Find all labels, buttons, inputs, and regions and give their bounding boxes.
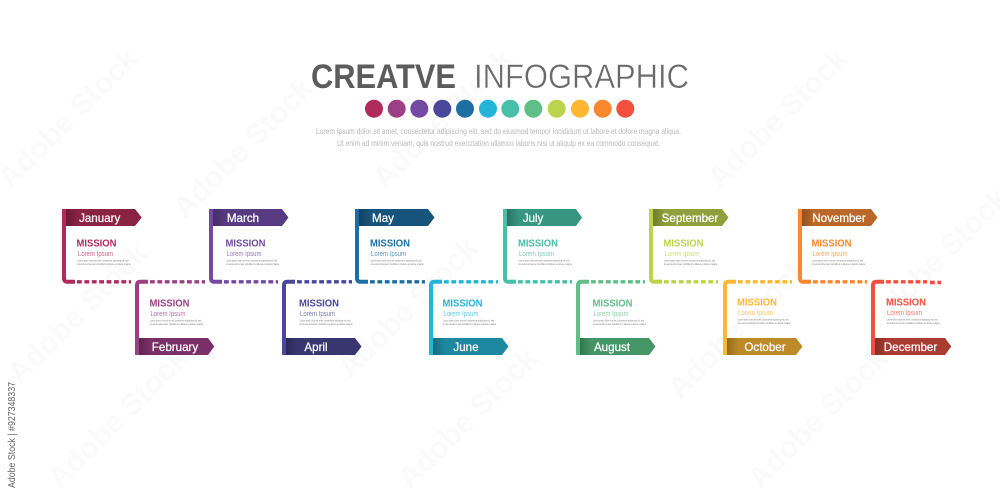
card: January: January xyxy=(79,212,121,225)
card: January xyxy=(64,209,142,282)
card: July: do eiusmod tempor incididunt ut labore et dolore magna xyxy=(518,262,572,266)
card: July: MISSION xyxy=(518,238,558,250)
text: Adobe Stock xyxy=(662,252,815,405)
card: May xyxy=(357,209,434,282)
card: June: do eiusmod tempor incididunt ut labore et dolore magna xyxy=(443,322,496,326)
card: December: do eiusmod tempor incididunt ut labore et dolore magna xyxy=(886,321,940,325)
card: November: Lorem ipsum dolor sit amet, consectetur adipiscing elit, sed xyxy=(812,258,863,262)
card: January: Lorem Ipsum xyxy=(78,249,113,258)
card: October xyxy=(725,282,802,355)
intro paragraph xyxy=(316,126,681,148)
colour dots row xyxy=(365,100,634,118)
card: May: Lorem Ipsum xyxy=(371,249,406,258)
card: October: October xyxy=(744,341,786,354)
card: July: July xyxy=(523,212,544,225)
card: November: MISSION xyxy=(812,238,852,250)
card: February: do eiusmod tempor incididunt ut labore et dolore magna xyxy=(150,322,203,326)
card: October: do eiusmod tempor incididunt ut labore et dolore magna xyxy=(738,321,791,325)
card: June: June xyxy=(453,341,479,354)
card: January: Lorem ipsum dolor sit amet, consectetur adipiscing elit, sed xyxy=(78,258,129,262)
card: January: do eiusmod tempor incididunt ut labore et dolore magna xyxy=(78,262,131,266)
intro paragraph: Ut enim ad minim veniam, quis nostrud exercitation ullamco laboris nisi ut aliquip ex ea commodo consequat. xyxy=(337,138,660,148)
text: Adobe Stock xyxy=(392,342,545,495)
text: Adobe Stock xyxy=(367,42,520,195)
card: June: MISSION xyxy=(442,297,482,309)
card: July xyxy=(505,209,582,282)
title: INFOGRAPHIC xyxy=(474,58,689,96)
card: August: do eiusmod tempor incididunt ut labore et dolore magna xyxy=(593,322,646,326)
card: September: MISSION xyxy=(664,238,704,250)
card: September: do eiusmod tempor incididunt ut labore et dolore magna xyxy=(664,262,717,266)
card: March: Lorem Ipsum xyxy=(226,249,262,258)
card: April: Lorem ipsum dolor sit amet, consectetur adipiscing elit, sed xyxy=(300,318,351,322)
card: March xyxy=(211,209,288,282)
card: August: MISSION xyxy=(592,297,632,309)
card: February xyxy=(137,282,214,355)
text: Adobe Stock xyxy=(702,42,855,195)
card: August: August xyxy=(594,341,631,354)
card: September: September xyxy=(662,212,718,225)
card: December: MISSION xyxy=(886,296,926,308)
card: August: Lorem ipsum dolor sit amet, consectetur adipiscing elit, sed xyxy=(593,318,644,322)
card: December xyxy=(873,282,951,355)
card: May: do eiusmod tempor incididunt ut labore et dolore magna xyxy=(370,262,424,266)
card: May: MISSION xyxy=(370,238,410,250)
card: August xyxy=(578,282,656,355)
card: July: Lorem Ipsum xyxy=(519,249,554,258)
card: April: Lorem Ipsum xyxy=(300,309,335,318)
card: November: Lorem Ipsum xyxy=(812,249,848,258)
card: October: Lorem Ipsum xyxy=(738,308,773,317)
card: October: Lorem ipsum dolor sit amet, consectetur adipiscing elit, sed xyxy=(738,318,789,322)
card: March: do eiusmod tempor incididunt ut labore et dolore magna xyxy=(226,262,279,266)
card: October: MISSION xyxy=(737,296,777,308)
text: Adobe Stock xyxy=(742,342,895,495)
card: March: March xyxy=(227,212,259,225)
card: June: Lorem ipsum dolor sit amet, consectetur adipiscing elit, sed xyxy=(443,318,494,322)
title xyxy=(311,58,689,96)
card: December: Lorem ipsum dolor sit amet, consectetur adipiscing elit, sed xyxy=(886,318,938,322)
card: March: MISSION xyxy=(226,238,266,250)
card: February: February xyxy=(152,341,198,354)
card: April: MISSION xyxy=(299,297,339,309)
card: November: do eiusmod tempor incididunt ut labore et dolore magna xyxy=(812,262,865,266)
card: July: Lorem ipsum dolor sit amet, consectetur adipiscing elit, sed xyxy=(518,258,570,262)
card: September: Lorem Ipsum xyxy=(664,249,700,258)
intro paragraph: Lorem ipsum dolor sit amet, consectetur adipiscing elit, sed do eiusmod tempor incididunt ut labore et dolore magna aliqua. xyxy=(316,126,681,136)
card: September xyxy=(651,209,728,282)
card: April xyxy=(284,282,362,355)
card: May: May xyxy=(372,212,394,225)
card: April: April xyxy=(304,341,328,354)
card: February: Lorem Ipsum xyxy=(150,309,186,318)
text: Adobe Stock xyxy=(2,237,155,390)
card: February: MISSION xyxy=(150,297,190,309)
text: Adobe Stock xyxy=(332,232,485,385)
card: December: December xyxy=(884,341,937,354)
card: September: Lorem ipsum dolor sit amet, consectetur adipiscing elit, sed xyxy=(664,258,715,262)
card: June: Lorem Ipsum xyxy=(444,309,478,318)
card: March: Lorem ipsum dolor sit amet, consectetur adipiscing elit, sed xyxy=(226,258,277,262)
text: Adobe Stock xyxy=(42,342,195,495)
stock id side label: Adobe Stock | #927348337 xyxy=(7,382,18,488)
card: November: November xyxy=(812,212,866,225)
title: CREATVE xyxy=(311,58,456,96)
card: November xyxy=(800,209,878,282)
card: December: Lorem Ipsum xyxy=(887,308,922,317)
card: February: Lorem ipsum dolor sit amet, consectetur adipiscing elit, sed xyxy=(150,318,201,322)
card: June xyxy=(431,282,508,355)
card: April: do eiusmod tempor incididunt ut labore et dolore magna xyxy=(300,322,353,326)
text: Adobe Stock xyxy=(167,72,320,225)
card: January: MISSION xyxy=(76,238,116,250)
card: August: Lorem Ipsum xyxy=(594,309,628,318)
card: May: Lorem ipsum dolor sit amet, consectetur adipiscing elit, sed xyxy=(370,258,422,262)
